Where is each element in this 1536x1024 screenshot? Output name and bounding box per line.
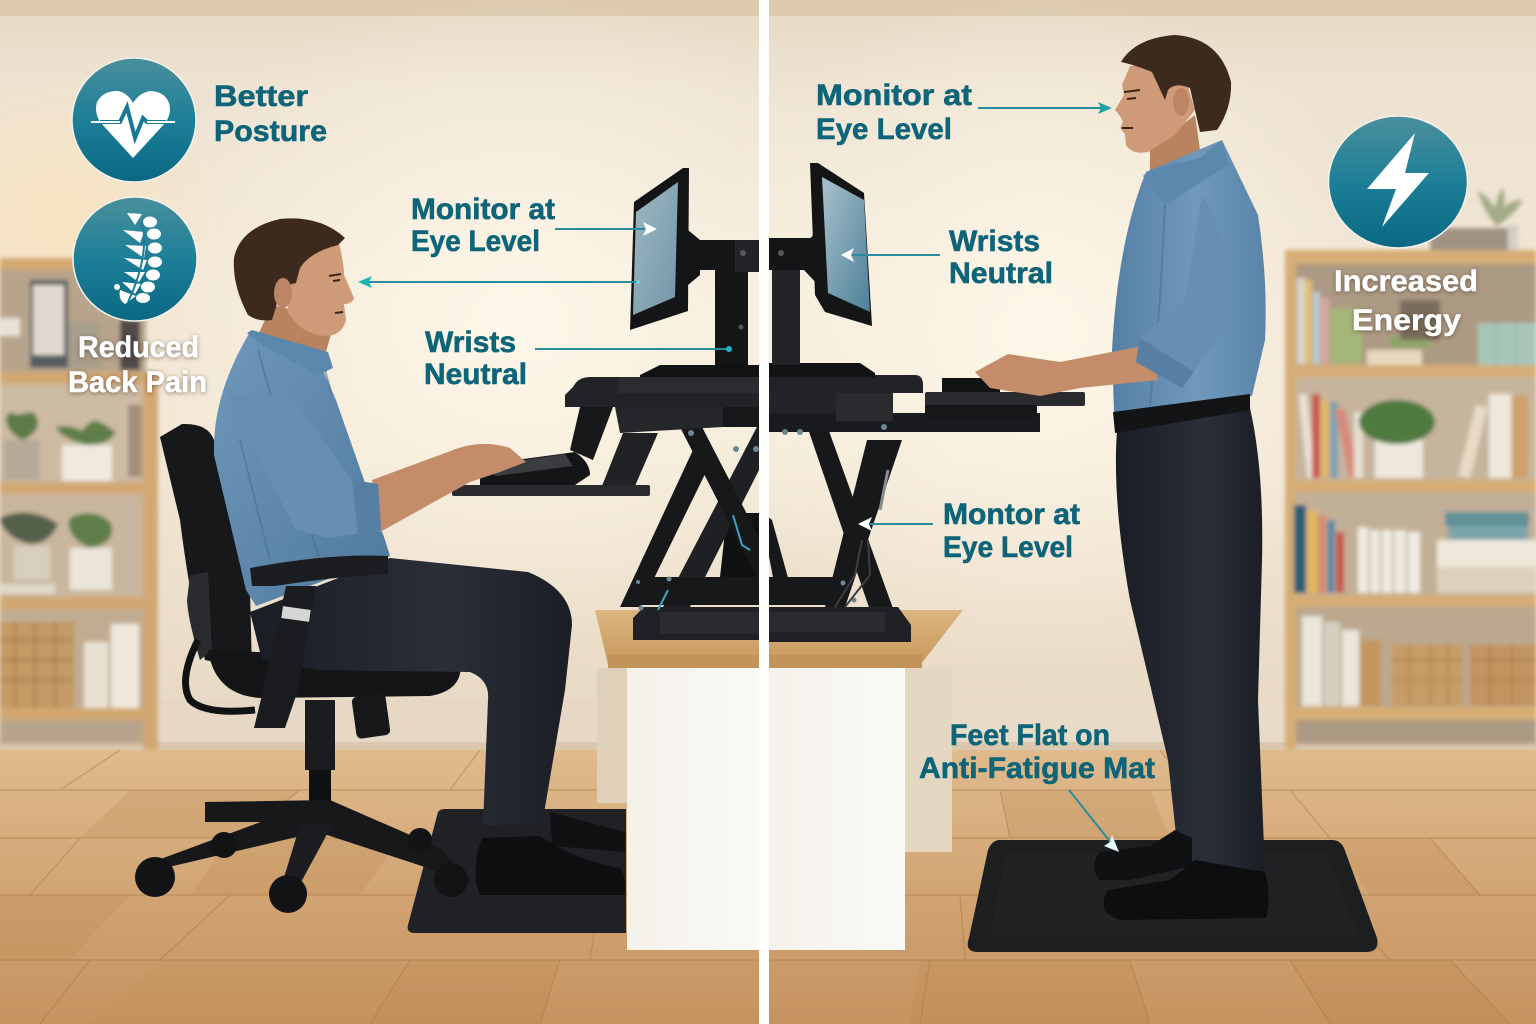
label: better posture: Better: [214, 80, 308, 113]
left standing desk converter with monitor: [452, 168, 759, 640]
label: increased energy: [1334, 265, 1478, 337]
standing man: neck: [1150, 115, 1205, 185]
mat bevel: [990, 852, 1358, 936]
standing man: forearm and hand: [975, 345, 1158, 396]
left desk: [595, 610, 762, 950]
label: left wrists neutral: Wrists: [425, 326, 516, 359]
seated man: neck: [258, 305, 335, 366]
seated man: office chair: [135, 424, 468, 913]
label: right wrists neutral: Neutral: [949, 257, 1053, 290]
label: reduced back pain: [68, 331, 207, 399]
badge: better posture heart icon: [72, 58, 196, 182]
left riser: [565, 365, 759, 640]
arrow: to riser leg: [858, 517, 933, 531]
standing man: shirt: [1112, 140, 1266, 412]
arrow: to left monitor: [555, 222, 657, 236]
label: reduced back pain: Back Pain: [68, 366, 207, 399]
label: left monitor at eye level: Monitor at: [411, 193, 555, 226]
label: montor at eye level: [943, 498, 1080, 564]
label: right wrists neutral: Wrists: [949, 225, 1040, 258]
arrow: to standing man's eye: [978, 102, 1112, 114]
standing man: hair: [1121, 35, 1231, 132]
right monitor: [810, 163, 872, 326]
seated man: face: [288, 240, 354, 336]
right bookshelf: [1285, 188, 1536, 750]
seated man: trousers: [250, 558, 572, 825]
label: right monitor at eye level: Monitor at: [816, 79, 972, 112]
right riser: [760, 363, 1085, 642]
right standing desk converter with monitor: [760, 163, 1085, 642]
label: left wrists neutral: Neutral: [424, 358, 527, 391]
left keyboard tray: [452, 452, 650, 496]
standing man: sleeve: [1136, 195, 1227, 388]
standing man: face: [1115, 60, 1195, 153]
chair armrest in front of seated man: [250, 556, 388, 728]
seated man: shirt: [214, 332, 390, 606]
right monitor stand: [769, 236, 814, 365]
right desk: [766, 610, 963, 950]
seated man: near shoe: [475, 836, 625, 895]
label: montor at eye level: Eye Level: [943, 531, 1073, 564]
arrow: left monitor to eye: [358, 276, 640, 288]
label: reduced back pain: Reduced: [78, 331, 199, 364]
left floor mat: [408, 809, 626, 933]
arrow: to right monitor: [841, 248, 940, 262]
label: right monitor at eye level: [816, 79, 972, 146]
standing man: trousers: [1116, 408, 1265, 872]
seated man: ear: [274, 278, 292, 308]
left bookshelf: [0, 258, 158, 750]
arrow: to anti-fatigue mat: [1069, 790, 1119, 852]
label: feet flat on anti-fatigue mat: [919, 719, 1155, 785]
standing man: near shoe: [1104, 860, 1269, 920]
label: right monitor at eye level: Eye Level: [816, 113, 952, 146]
label: feet flat on anti-fatigue mat: Anti-Fatigue Mat: [919, 752, 1155, 785]
standing man: belt: [1113, 394, 1250, 433]
central white divider: [759, 0, 769, 1024]
label: increased energy: Increased: [1334, 265, 1478, 298]
label: feet flat on anti-fatigue mat: Feet Flat on: [950, 719, 1110, 752]
standing man: floor mat: [968, 840, 1378, 952]
label: left monitor at eye level: [411, 193, 555, 258]
badge: increased energy lightning icon: [1328, 116, 1468, 248]
label: better posture: [214, 80, 327, 148]
left monitor stand: [688, 230, 760, 365]
room background: wall: [0, 0, 1536, 752]
label: montor at eye level: Montor at: [943, 498, 1080, 531]
seated man: far shoe: [550, 812, 625, 852]
standing man: far shoe: [1094, 830, 1192, 880]
label: left monitor at eye level: Eye Level: [411, 225, 540, 258]
label: left wrists neutral: [424, 326, 527, 391]
seated man: forearm and hand: [372, 444, 526, 532]
seated man: figure: [214, 218, 625, 895]
arrow: left wrists to stand: [535, 346, 732, 352]
badge: reduced back pain spine icon: [73, 197, 197, 321]
standing man: ear: [1173, 88, 1189, 116]
wood floor: [0, 750, 1536, 1024]
seated man: sleeve: [226, 395, 381, 538]
label: better posture: Posture: [214, 115, 327, 148]
seated man: hair: [234, 218, 345, 320]
label: increased energy: Energy: [1352, 304, 1461, 337]
left monitor: [630, 168, 689, 330]
label: right wrists neutral: [949, 225, 1053, 290]
standing man: figure: [975, 35, 1269, 920]
